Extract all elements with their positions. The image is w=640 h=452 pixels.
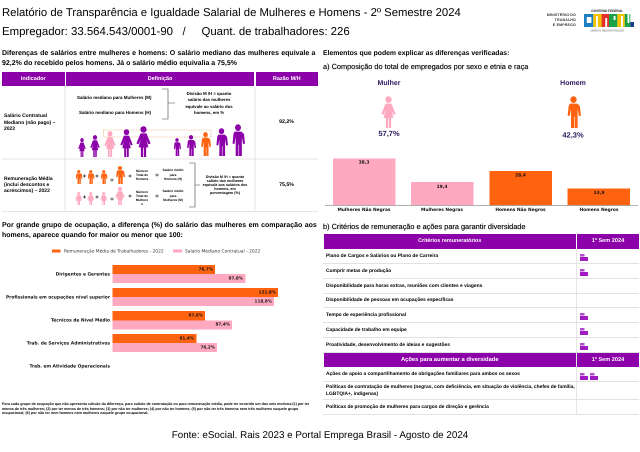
average division explanation [202,175,248,195]
average division explanation: porcentagem (%) [210,191,240,195]
row 1 ratio: 92,2% [279,119,294,125]
criterion 1: Plano de Cargos e Salários ou Plano de Carreira [326,254,438,259]
actions header [324,353,576,367]
horizontal bar chart: Dirigentes e Gerentes [56,272,110,278]
horizontal bar chart [6,248,278,370]
division explanation: Divisão M /H = quanto [187,91,231,96]
total women label: Número [136,190,148,194]
total men label [136,168,148,180]
criterion 3: Disponibilidade para horas extras, reuniões com clientes e viagens [326,284,482,289]
total men label: Número [136,168,148,172]
actions period header: 1º Sem 2024 [592,357,624,363]
criteria header [324,234,576,249]
average division explanation: salário das mulheres [207,179,243,183]
criterion 1 [323,250,639,264]
figures and braces: = [110,197,114,203]
footnote: Para cada grupo de ocupação que não apresenta cálculo da diferença, para salário de contratação ou para remuneração média, pode ter ocorrido um dos seis motivos:(1) por ter [2,402,309,406]
figures and braces: = [155,194,159,200]
bar chart: 19,4 [437,184,447,190]
horizontal bar chart: 121,8% [259,290,277,294]
division explanation: homens, em % [194,110,224,115]
ministry label [547,12,576,27]
woman block: Mulher [378,79,401,87]
row 2 ratio: 75,5% [279,182,294,188]
criteria period header: 1º Sem 2024 [592,238,624,244]
figures and braces: + [128,194,132,200]
man block: Homem [560,80,586,87]
mark 6 [580,373,588,380]
actions header: Ações para aumentar a diversidade [401,357,499,363]
criterion 5 [323,308,639,323]
table header: indicador [2,72,64,86]
left heading: wage differences: Diferenças de salários entre mulheres e homens: O salário mediano das mulheres equivale a [2,50,315,57]
actions period header [577,353,639,367]
left heading: wage differences [2,50,316,67]
total women label: Mulhere [136,198,148,202]
panel: indicator table [2,72,318,212]
average men label: para [170,172,176,176]
right heading: elements: Elementos que podem explicar as diferenças verificadas: [323,50,509,57]
column divider [576,249,577,415]
source line: Fonte: eSocial. Rais 2023 e Portal Emprega Brasil - Agosto de 2024 [172,430,468,441]
criterion 7: Proatividade, desenvolvimento de ideias e sugestões [326,343,450,348]
criterion 6: Capacidade de trabalho em equipe [326,328,407,333]
criterion 5: Tempo de experiência profissional [326,313,406,318]
horizontal bar chart: 76,7% [198,266,214,272]
bar chart [325,158,638,213]
action 1 [323,367,639,382]
footnote [2,402,310,415]
average women label: para [170,194,176,198]
brasil logo: GOVERNO FEDERAL [591,9,623,13]
mark 5 [580,343,588,350]
horizontal bar chart: Profissionais em ocupações nível superior [6,294,111,300]
total women label [136,190,148,206]
criterion 2: Cumprir metas de produção [326,269,391,274]
row 2 indicator: Remuneração Média (inclui descontos e acréscimos) – 2022 [4,176,53,194]
horizontal bar chart: 97,8% [228,276,244,280]
criterion 4 [323,294,639,308]
bar chart: Mulheres Negras [421,207,463,213]
average men label: Salário médio [163,168,183,172]
total men label: Total de [136,172,148,176]
occupation heading [2,222,317,239]
left heading: wage differences: 92,2% do recebido pelos homens. Já o salário médio equivalia a 75,5% [2,60,237,67]
figures and braces: + [128,174,132,180]
action 3 [323,400,639,415]
logos: ministry and government [547,9,634,32]
woman block [378,79,401,138]
division explanation: equivale ao salário dos [185,104,233,109]
figures and braces: + [95,195,99,201]
occupation heading: Por grande grupo de ocupação, a diferença (%) do salário das mulheres em comparação aos [2,222,317,229]
panel: composition by sex [325,79,638,213]
brasil logo [584,9,634,32]
figures and braces: + [95,174,99,180]
bar chart: 38,3 [359,160,369,166]
division explanation: salário das mulheres [188,97,230,102]
bar chart: Homens Não Negros [495,207,546,213]
mark 3 [580,313,588,320]
table header: indicador: Indicador [21,76,46,82]
occupation heading: homens, aparece quando for maior ou menor que 100: [2,232,183,239]
mark 1 [580,254,588,261]
total women label: s [141,202,143,206]
brasil logo: UNIÃO E RECONSTRUÇÃO [590,28,625,32]
action 2: Políticas de contratação de mulheres (negras, com deficiência, em situação de violência, chefes de família, LGBTQIA+, indígenas) [326,385,575,396]
figures and braces: + [83,174,87,180]
subheading a: a) Composição do total de empregados por sexo e etnia e raça [323,62,528,71]
average women label [162,189,184,202]
mark 2 [580,269,588,276]
division explanation [185,91,233,115]
horizontal bar chart: Salário Mediano Contratual - 2022 [185,248,260,254]
bar chart: 13,9 [594,190,604,196]
figures and braces: = [155,173,159,179]
criterion 2 [323,264,639,279]
employer line: Empregador: 33.564.543/0001-90 / Quant. de trabalhadores: 226 [2,26,350,38]
footnote: ocupacional; (6) por não ter nem homens nem mulheres naquele grupo ocupacional. [2,411,148,415]
mark 7 [590,373,598,380]
average division explanation: homens, em [214,187,236,191]
table header: razao: Razão M/H [273,76,301,82]
panel: criteria table [324,234,639,414]
criteria header: Critérios remuneratórios [418,238,481,244]
horizontal bar chart: 67,8% [188,312,204,318]
check marks [580,254,598,380]
average division explanation: equivale aos salários dos [203,183,247,187]
average women label: Salário médio [163,189,183,193]
criterion 6 [323,323,639,338]
horizontal bar chart: 87,4% [215,322,231,326]
table header: definicao [66,72,254,86]
criteria period header [577,234,639,249]
horizontal bar chart: Trab. em Atividade Operacionais [30,364,110,370]
average men label: Homens (H) [164,177,182,181]
horizontal bar chart: 61,4% [179,336,195,340]
mark 4 [580,328,588,335]
man block [560,80,586,140]
woman block: 57,7% [378,129,400,138]
total men label: Homens [136,176,148,180]
table header: definicao: Definição [148,76,172,82]
horizontal bar chart: 118,8% [255,298,273,304]
bar chart: Mulheres Não Negras [337,207,391,213]
criterion 3 [323,279,639,294]
median men label: Salário mediano para Homens (H) [79,110,151,115]
horizontal bar chart: 76,2% [200,344,216,350]
table header: razao [256,72,318,86]
total women label: Total de [136,194,148,198]
horizontal bar chart: Remuneração Média de Trabalhadores - 2022 [64,248,164,254]
criterion 7 [323,338,639,353]
ministry label: E EMPREGO [553,23,576,27]
man block: 42,3% [562,130,584,140]
bar chart: 28,4 [515,172,526,178]
horizontal bar chart: Trab. de Serviços Administrativos [27,340,110,346]
ministry label: TRABALHO [555,18,576,22]
bar chart: Homens Negros [579,207,619,213]
action 2 [323,382,639,400]
subheading b: b) Critérios de remuneração e ações para garantir diversidade [323,222,525,231]
figures and braces [2,86,318,212]
ministry label: MINISTÉRIO DO [547,13,576,17]
horizontal bar chart: Técnicos de Nível Médio [51,318,110,324]
average division explanation: Divisão M /H = quanto [206,175,244,179]
action 1: Ações de apoio a compartilhamento de obrigações familiares para ambos os sexos [326,372,520,377]
average men label [162,168,184,181]
figures and braces: + [83,195,87,201]
action 3: Políticas de promoção de mulheres para cargos de direção e gerência [326,405,489,410]
row 1 indicator: Salário Contratual Mediano (não pago) – 2022 [4,113,55,132]
title: Relatório de Transparência e Igualdade Salarial de Mulheres e Homens - 2º Semestre 2024 [2,7,461,19]
figures and braces: = [110,178,114,184]
criterion 4: Disponibilidade de pessoas em ocupações específicas [326,298,453,303]
footnote: menos de três mulheres; (2) por ter menos de três homens; (3) por não ter mulheres; (4) por não ter homens; (5) por não ter três homens nem três mulheres naquele grupo [2,407,298,411]
median women label: Salário mediano para Mulheres (M) [77,95,152,100]
average women label: Mulheres (M) [163,198,183,202]
